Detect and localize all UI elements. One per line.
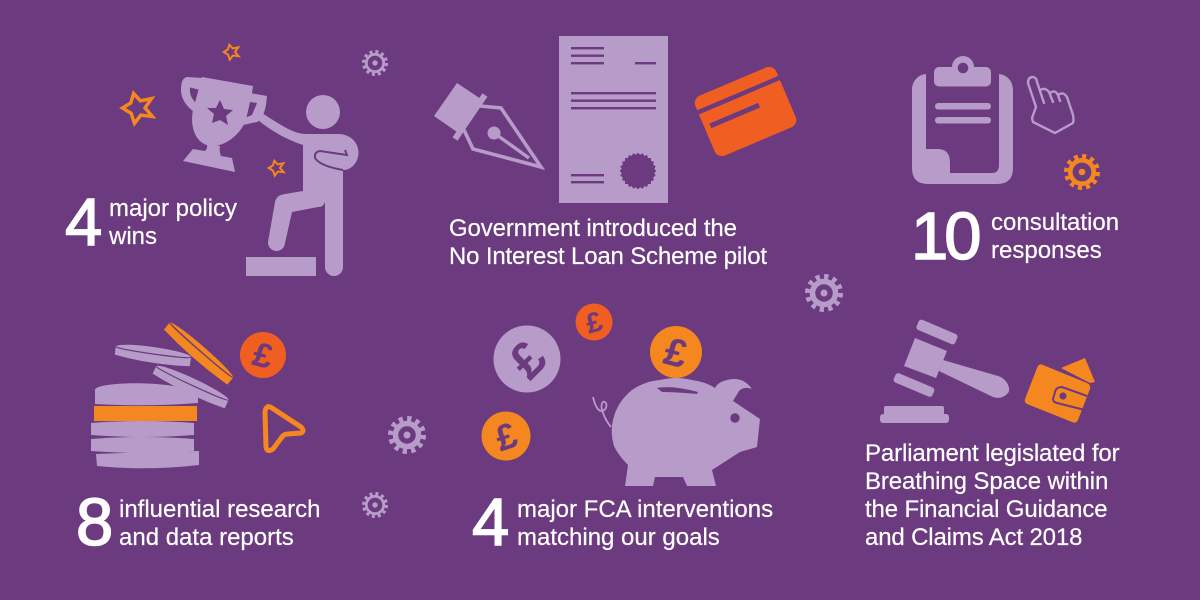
stat text: and data reports [119,524,294,551]
icon: legal document [559,36,668,203]
icon: pound coin small red [576,304,612,340]
stat text: consultation [991,209,1119,236]
icon: gavel [880,319,1009,423]
icon: large star [122,94,152,123]
panel: no interest loan [434,36,800,270]
icon: pound coin small red: £ [583,305,606,339]
icon: small star lower [269,161,284,176]
icon: pound coin orange upper [650,326,702,378]
panel: research reports [76,320,320,560]
stat number: 4 [65,185,102,260]
icon: piggy bank [593,378,760,486]
stat text: Government introduced the [449,215,737,242]
panel: consultation responses [911,56,1119,274]
panel: policy wins [65,45,359,276]
stat text: influential research [119,496,320,523]
icon: pound coin orange upper: £ [660,330,692,377]
icon: fountain pen nib [434,83,541,167]
icon: pound coin red: £ [249,335,277,377]
icon: clipboard [912,56,1013,184]
gear top left [364,52,386,74]
gear bottom small [364,494,386,516]
gear orange [1066,156,1098,188]
icon: pound coin orange lower [482,412,530,460]
stat text: major policy [109,195,237,222]
stat text: Parliament legislated for [865,440,1120,467]
stat text: major FCA interventions [517,496,773,523]
icon: credit card [691,64,800,159]
icon: figure holding trophy [181,77,359,276]
stat number: 10 [911,199,979,274]
gear centre right [808,276,840,310]
stat text: wins [108,223,157,250]
icon: wallet [1025,358,1095,423]
icon: cursor arrow [265,407,303,451]
stat text: No Interest Loan Scheme pilot [449,243,767,270]
icon: small star top [224,45,239,60]
panel: breathing space [865,319,1120,551]
stat number: 8 [76,485,113,560]
stat text: Breathing Space within [865,468,1108,495]
icon: coin stack [91,320,236,468]
icon: pointing hand [1028,77,1074,133]
gear lower middle [390,418,424,452]
icon: pound coin lilac: £ [498,330,557,389]
stat number: 4 [472,485,509,560]
stat text: and Claims Act 2018 [865,524,1082,551]
stat text: responses [991,237,1102,264]
icon: pound coin red [240,332,286,378]
stat text: the Financial Guidance [865,496,1107,523]
icon: pound coin orange lower: £ [490,414,522,459]
panel: FCA interventions [472,304,773,560]
stat text: matching our goals [517,524,720,551]
